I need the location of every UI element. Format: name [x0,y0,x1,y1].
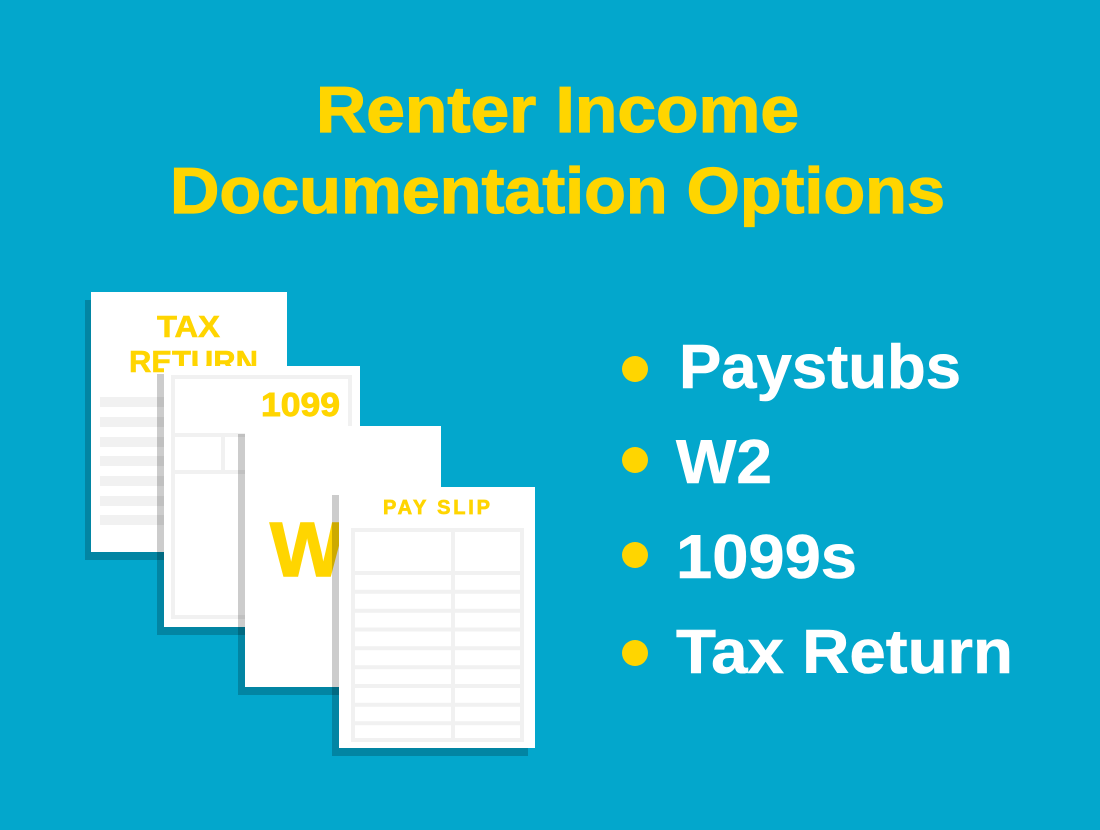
document: 1099 [157,366,360,635]
document: 1099: 1099 [261,386,340,423]
title: Documentation Options [170,154,945,227]
bullet list [622,333,1013,687]
title [170,73,945,227]
list item: W2: W2 [676,428,772,497]
document: pay slip [332,487,535,756]
list item: Tax Return: Tax Return [676,618,1013,687]
document: pay slip: PAY SLIP [383,497,490,519]
title: Renter Income [316,73,799,146]
document: W2: W2 [270,507,388,593]
list item: Paystubs: Paystubs [679,333,961,402]
list item: W2 [622,428,772,497]
document: tax return: RETURN [129,344,258,379]
illustration: stack of income documents [85,292,535,756]
document: tax return [85,292,287,560]
list item: 1099s: 1099s [676,523,857,592]
document: tax return: TAX [157,309,220,344]
document: W2 [238,426,441,695]
